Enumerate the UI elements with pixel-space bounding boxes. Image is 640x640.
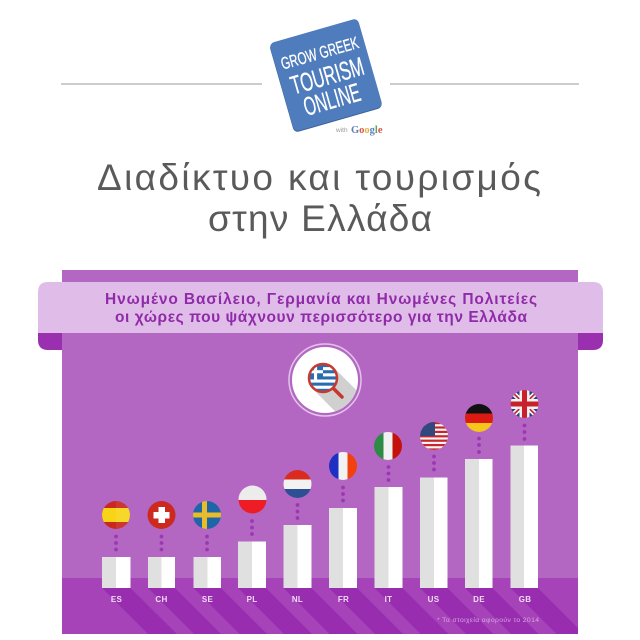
logo badge	[269, 19, 383, 133]
ribbon heading	[105, 291, 537, 326]
icon: flag United Kingdom	[510, 390, 539, 418]
country labels: CH	[155, 595, 168, 604]
logo text: ONLINE	[300, 77, 364, 122]
title: Διαδίκτυο και τουρισμός	[97, 157, 541, 198]
logo: Grow Greek Tourism Online	[269, 18, 383, 136]
panel: purple chart background	[62, 270, 594, 640]
icon: flag Netherlands	[283, 470, 312, 498]
bar FR	[329, 508, 357, 588]
country labels: FR	[338, 595, 349, 604]
country labels	[111, 595, 531, 604]
country labels: NL	[292, 595, 303, 604]
icon: flag France	[329, 452, 358, 480]
floor band	[62, 578, 578, 634]
logo text	[279, 33, 376, 124]
with Google: Google	[351, 125, 383, 136]
ribbon fold right	[578, 333, 603, 350]
icon: flag Italy	[374, 432, 402, 460]
bar SE	[194, 557, 221, 588]
bar ES	[102, 557, 130, 588]
country labels: DE	[473, 595, 485, 604]
ribbon banner	[38, 282, 603, 333]
bar PL	[238, 542, 266, 588]
country labels: GB	[519, 595, 531, 604]
icon: flag Poland	[238, 485, 267, 514]
connector dots	[114, 424, 526, 551]
country labels: US	[428, 595, 440, 604]
bar chart	[102, 446, 538, 588]
icon: flag Switzerland	[147, 501, 176, 529]
bar US	[420, 478, 448, 588]
with Google	[335, 125, 383, 136]
ribbon heading: Ηνωμένο Βασίλειο, Γερμανία και Ηνωμένες Πολιτείες	[105, 291, 537, 308]
logo text: GROW GREEK	[279, 33, 361, 74]
icon: flag Spain	[102, 501, 130, 529]
bar DE	[465, 459, 492, 588]
bar GB	[510, 446, 538, 588]
icon: flag USA	[420, 422, 448, 451]
header rule left	[61, 83, 262, 85]
footnote: * Τα στοιχεία αφορούν το 2014	[437, 616, 539, 624]
bar shadows	[102, 588, 578, 634]
title: στην Ελλάδα	[208, 198, 432, 239]
header rule right	[390, 83, 579, 85]
country labels: ES	[111, 595, 122, 604]
title	[97, 157, 541, 239]
country labels: IT	[385, 595, 392, 604]
ribbon heading: οι χώρες που ψάχνουν περισσότερο για την Ελλάδα	[115, 309, 527, 326]
logo text: TOURISM	[287, 51, 367, 100]
country labels: SE	[202, 595, 213, 604]
bar CH	[148, 557, 175, 588]
country labels: PL	[247, 595, 257, 604]
icon: flag Germany	[465, 404, 493, 432]
icon: magnifier over Greek flag	[288, 343, 362, 417]
bar IT	[374, 487, 402, 588]
ribbon fold left	[38, 333, 62, 350]
with Google: with	[335, 127, 348, 134]
icon: flag Sweden	[193, 501, 221, 529]
bar NL	[284, 525, 312, 588]
